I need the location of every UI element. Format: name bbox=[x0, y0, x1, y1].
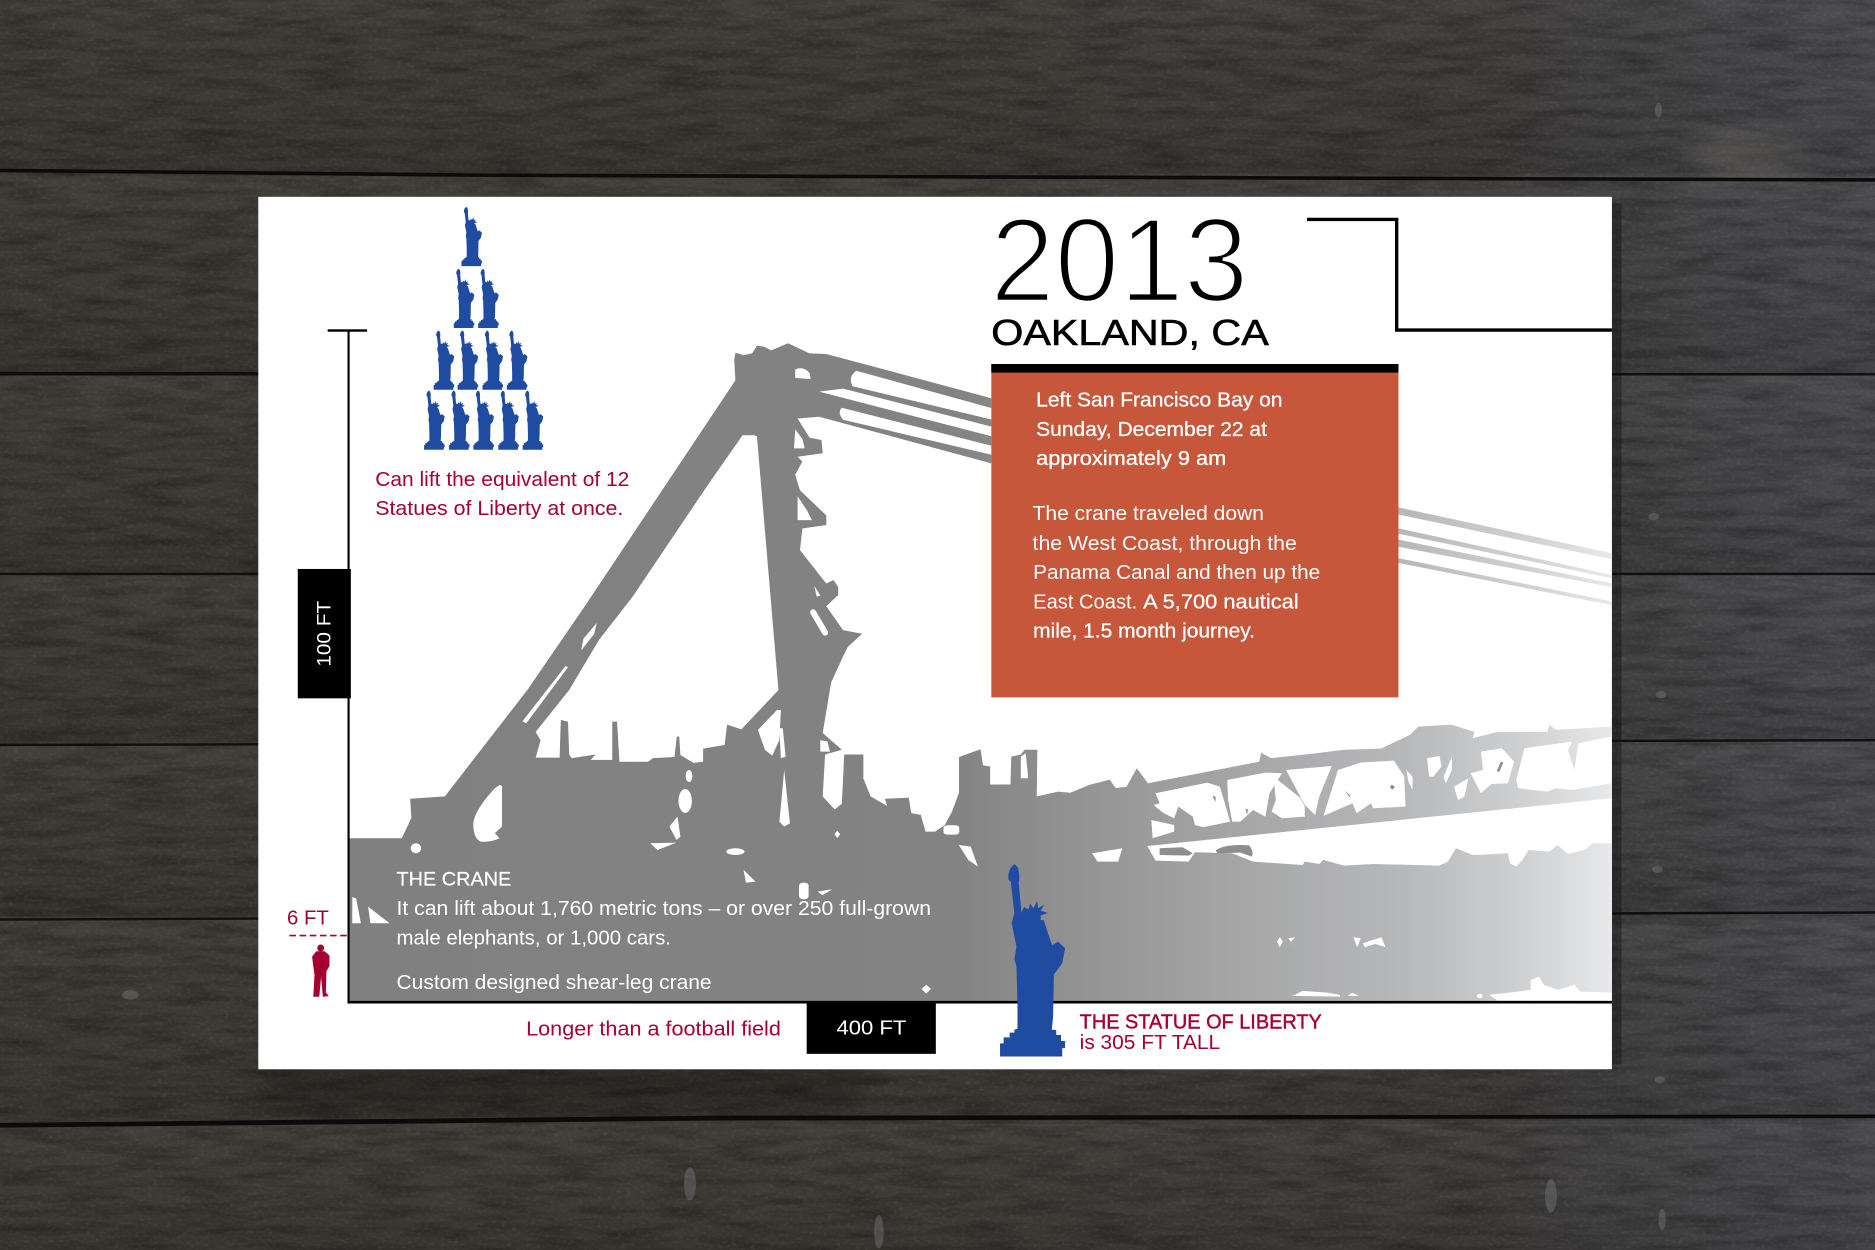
journey text: Panama Canal and then up the bbox=[1033, 562, 1320, 584]
100 FT label: 100 FT bbox=[315, 601, 336, 667]
crane description: It can lift about 1,760 metric tons – or over 250 full-grown bbox=[397, 898, 931, 920]
journey text: The crane traveled down bbox=[1033, 503, 1264, 525]
statues caption: Statues of Liberty at once. bbox=[375, 498, 623, 520]
white cut-outs: frame triangle and head bbox=[523, 368, 993, 763]
journey text bbox=[1033, 503, 1320, 642]
journey text: East Coast. bbox=[1033, 592, 1137, 614]
crane description bbox=[397, 869, 931, 994]
departure text: Left San Francisco Bay on bbox=[1036, 390, 1282, 412]
400 FT label: 400 FT bbox=[836, 1017, 906, 1039]
departure text: approximately 9 am bbox=[1036, 448, 1226, 470]
crane silhouette bbox=[348, 343, 1612, 1002]
statues caption: Can lift the equivalent of 12 bbox=[375, 469, 629, 491]
statue caption: is 305 FT TALL bbox=[1080, 1032, 1220, 1054]
departure text: Sunday, December 22 at bbox=[1036, 419, 1267, 441]
icon: pyramid of 12 statues of liberty bbox=[425, 207, 543, 449]
6 FT human scale bbox=[287, 907, 348, 997]
100 FT label bbox=[298, 569, 351, 698]
journey text: the West Coast, through the bbox=[1033, 533, 1297, 555]
panel: journey box bbox=[991, 364, 1398, 697]
icon: statue of liberty bbox=[1000, 864, 1065, 1056]
crane description: male elephants, or 1,000 cars. bbox=[397, 928, 671, 950]
white cut-outs: deck, drawn in zoomed coordinates bbox=[352, 710, 978, 994]
icon: person bbox=[312, 945, 329, 997]
top connector line bbox=[1307, 219, 1612, 330]
journey text: mile, 1.5 month journey. bbox=[1033, 620, 1255, 642]
crane description: Custom designed shear-leg crane bbox=[397, 972, 712, 994]
vertical height axis bbox=[328, 329, 367, 1002]
journey text: A 5,700 nautical bbox=[1143, 592, 1299, 614]
cables right of the box bbox=[1397, 507, 1612, 605]
panel: white poster card bbox=[258, 194, 1612, 1069]
departure text bbox=[1036, 390, 1282, 470]
crane description: THE CRANE bbox=[397, 869, 511, 891]
statue caption bbox=[1080, 1011, 1322, 1054]
statue caption: THE STATUE OF LIBERTY bbox=[1080, 1011, 1322, 1033]
statues caption bbox=[375, 469, 629, 520]
title: location: OAKLAND, CA bbox=[991, 313, 1269, 353]
horizontal length axis bbox=[347, 1001, 1612, 1004]
title: year: 2013 bbox=[990, 194, 1248, 327]
400 FT label: Longer than a football field bbox=[526, 1019, 781, 1041]
white cut-outs: truss and lower band, drawn in zoomed coordinates bbox=[1021, 737, 1612, 1001]
6 FT human scale: 6 FT bbox=[287, 907, 329, 929]
400 FT label bbox=[526, 1002, 936, 1054]
